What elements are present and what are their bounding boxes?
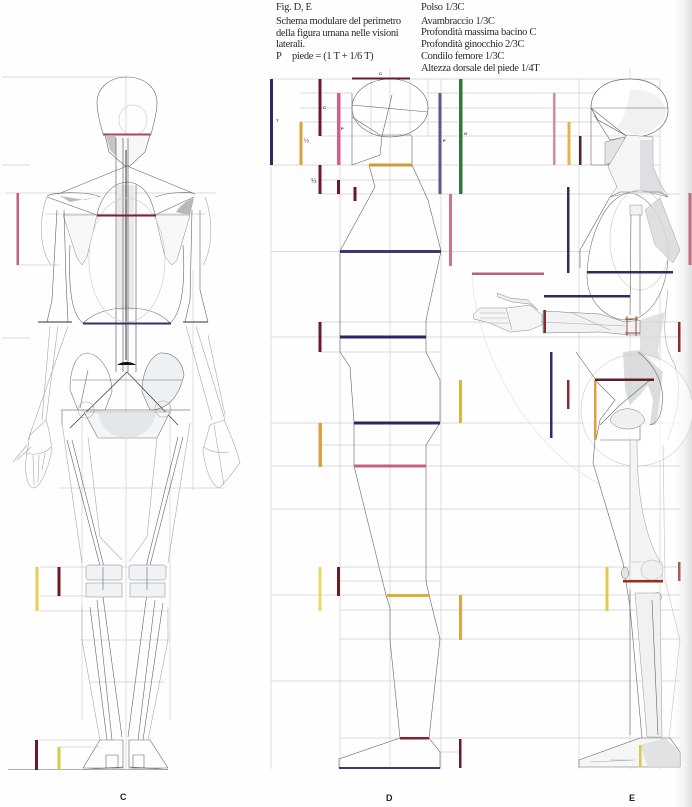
D: waist measure xyxy=(340,336,426,338)
C: ankle dark red bar xyxy=(35,740,38,770)
caption: right column: Altezza dorsale del piede 1/4T xyxy=(421,63,540,74)
E: right pink bar xyxy=(688,193,692,265)
E: shoulder and torso xyxy=(580,190,680,320)
D: T bar xyxy=(270,79,273,165)
D: hip yellow bar xyxy=(318,423,322,467)
D: base measure xyxy=(339,767,440,769)
D: C bar xyxy=(318,79,322,136)
C: scapulae xyxy=(63,215,190,265)
E: shin xyxy=(635,593,662,737)
E: arm xyxy=(543,310,640,336)
D: ankle measure xyxy=(400,737,429,740)
D: G bar xyxy=(459,79,462,194)
E: navy arm measure xyxy=(544,295,630,298)
C: legs xyxy=(62,423,190,740)
E: knee xyxy=(622,560,663,602)
C: neck measure xyxy=(103,134,151,136)
E: foot yellow bar xyxy=(639,745,642,767)
D: knee yellow bar xyxy=(318,567,322,611)
E: thigh front contour xyxy=(576,352,642,738)
C: baseline xyxy=(8,768,168,770)
E: large arc xyxy=(472,273,600,484)
D: top measure xyxy=(352,78,410,80)
D: fractions and letters: P xyxy=(443,138,446,143)
D: hip pink measure xyxy=(354,464,426,468)
C: hands xyxy=(13,420,240,488)
D: right yellow bar xyxy=(459,380,462,423)
E: knee dark bar xyxy=(678,562,680,581)
caption: left column: piede = (1 T + 1/6 T) xyxy=(292,51,374,62)
C: knee dark red bar xyxy=(58,567,60,596)
C: shoulder lines xyxy=(47,166,195,215)
C: knee yellow bar xyxy=(36,567,38,611)
D: pink bar xyxy=(337,93,340,165)
D: ankle dark bar xyxy=(459,739,462,768)
C: ankle yellow bar xyxy=(58,747,60,770)
E: back of waist xyxy=(640,312,665,362)
caption: left column: Fig. D, E xyxy=(276,2,312,13)
E: dark pelvis measure xyxy=(595,378,654,381)
C: spine xyxy=(116,138,136,372)
C: waist measure xyxy=(83,322,171,324)
E: hand xyxy=(473,293,542,332)
E: pink head bar xyxy=(553,93,556,165)
E: navy chest measure xyxy=(587,271,673,274)
D: fractions and letters: ⅓ xyxy=(311,176,317,185)
caption: left column: P xyxy=(276,51,282,62)
D: head outline xyxy=(352,79,428,165)
caption: right column: Profondità massima bacino C xyxy=(421,27,536,38)
E: femur xyxy=(630,440,662,580)
E: pink hand measure xyxy=(472,272,544,275)
E: yellow pelvis bar xyxy=(594,380,596,440)
C: feet xyxy=(83,740,168,770)
D: fractions and letters: T xyxy=(276,118,279,123)
D: small dark bars xyxy=(338,180,355,201)
C: pink bar xyxy=(16,193,19,265)
caption: right column: Condilo femore 1/3C xyxy=(421,51,504,62)
D: body outline xyxy=(339,136,441,768)
D: fractions and letters: P xyxy=(341,126,344,131)
D: fractions and letters: G xyxy=(464,131,467,136)
D: fractions and letters: ½ xyxy=(304,138,309,145)
D: pelvis measure xyxy=(354,422,440,424)
C: chest measure xyxy=(97,214,156,216)
D: calf yellow bar xyxy=(459,595,462,640)
D: C third bar xyxy=(318,165,322,194)
caption: right column xyxy=(421,2,540,74)
C: pelvis xyxy=(62,353,190,438)
caption: left column: della figura umana nelle visioni xyxy=(276,28,399,39)
caption: left column: Schema modulare del perimetro xyxy=(276,16,401,27)
C: guide lines xyxy=(2,77,225,769)
D: waist dark bar xyxy=(318,322,322,352)
caption: left column xyxy=(276,2,401,62)
D: fractions and letters xyxy=(276,71,467,185)
C: head xyxy=(97,77,157,135)
C: jaw and neck xyxy=(105,135,150,166)
figure C: front skeleton xyxy=(2,77,240,802)
E: navy pelvis bar xyxy=(550,352,552,438)
D: P bar xyxy=(438,93,442,194)
C: knees xyxy=(86,565,166,597)
D: knee dark bar xyxy=(337,567,340,596)
E: head xyxy=(591,79,668,165)
E: back contour xyxy=(663,445,680,738)
caption: right column: Avambraccio 1/3C xyxy=(421,16,495,27)
D: yellow half bar xyxy=(300,122,302,165)
E: waist dark bar xyxy=(678,322,680,352)
D: neck measure xyxy=(369,164,412,166)
E: dark head bar xyxy=(579,136,582,165)
label E: E xyxy=(629,793,635,803)
D: knee yellow measure xyxy=(387,594,430,597)
E: dark pelvis bar xyxy=(567,380,570,409)
C: rib cage xyxy=(70,198,184,323)
label D: D xyxy=(386,793,393,803)
caption: left column: laterali. xyxy=(276,39,305,50)
E: neck xyxy=(608,135,668,197)
E: knee measure xyxy=(623,580,663,582)
D: right pink bar xyxy=(449,194,452,266)
D: fractions and letters: C xyxy=(379,71,382,76)
label C: C xyxy=(120,792,127,802)
E: pelvis xyxy=(581,350,692,466)
E: navy torso bar xyxy=(567,187,570,273)
E: foot xyxy=(579,738,680,767)
C: arms xyxy=(28,197,225,440)
figure E: side skeleton xyxy=(472,79,692,803)
construction grid for D and E xyxy=(271,68,680,769)
E: knee yellow bar xyxy=(606,567,608,611)
E: yellow head bar xyxy=(568,122,570,165)
caption: right column: Polso 1/3C xyxy=(421,2,464,13)
figure D: perimeter schema xyxy=(270,71,467,803)
D: chest measure xyxy=(340,250,441,253)
caption: right column: Profondità ginocchio 2/3C xyxy=(421,39,524,50)
D: fractions and letters: C xyxy=(323,105,326,110)
